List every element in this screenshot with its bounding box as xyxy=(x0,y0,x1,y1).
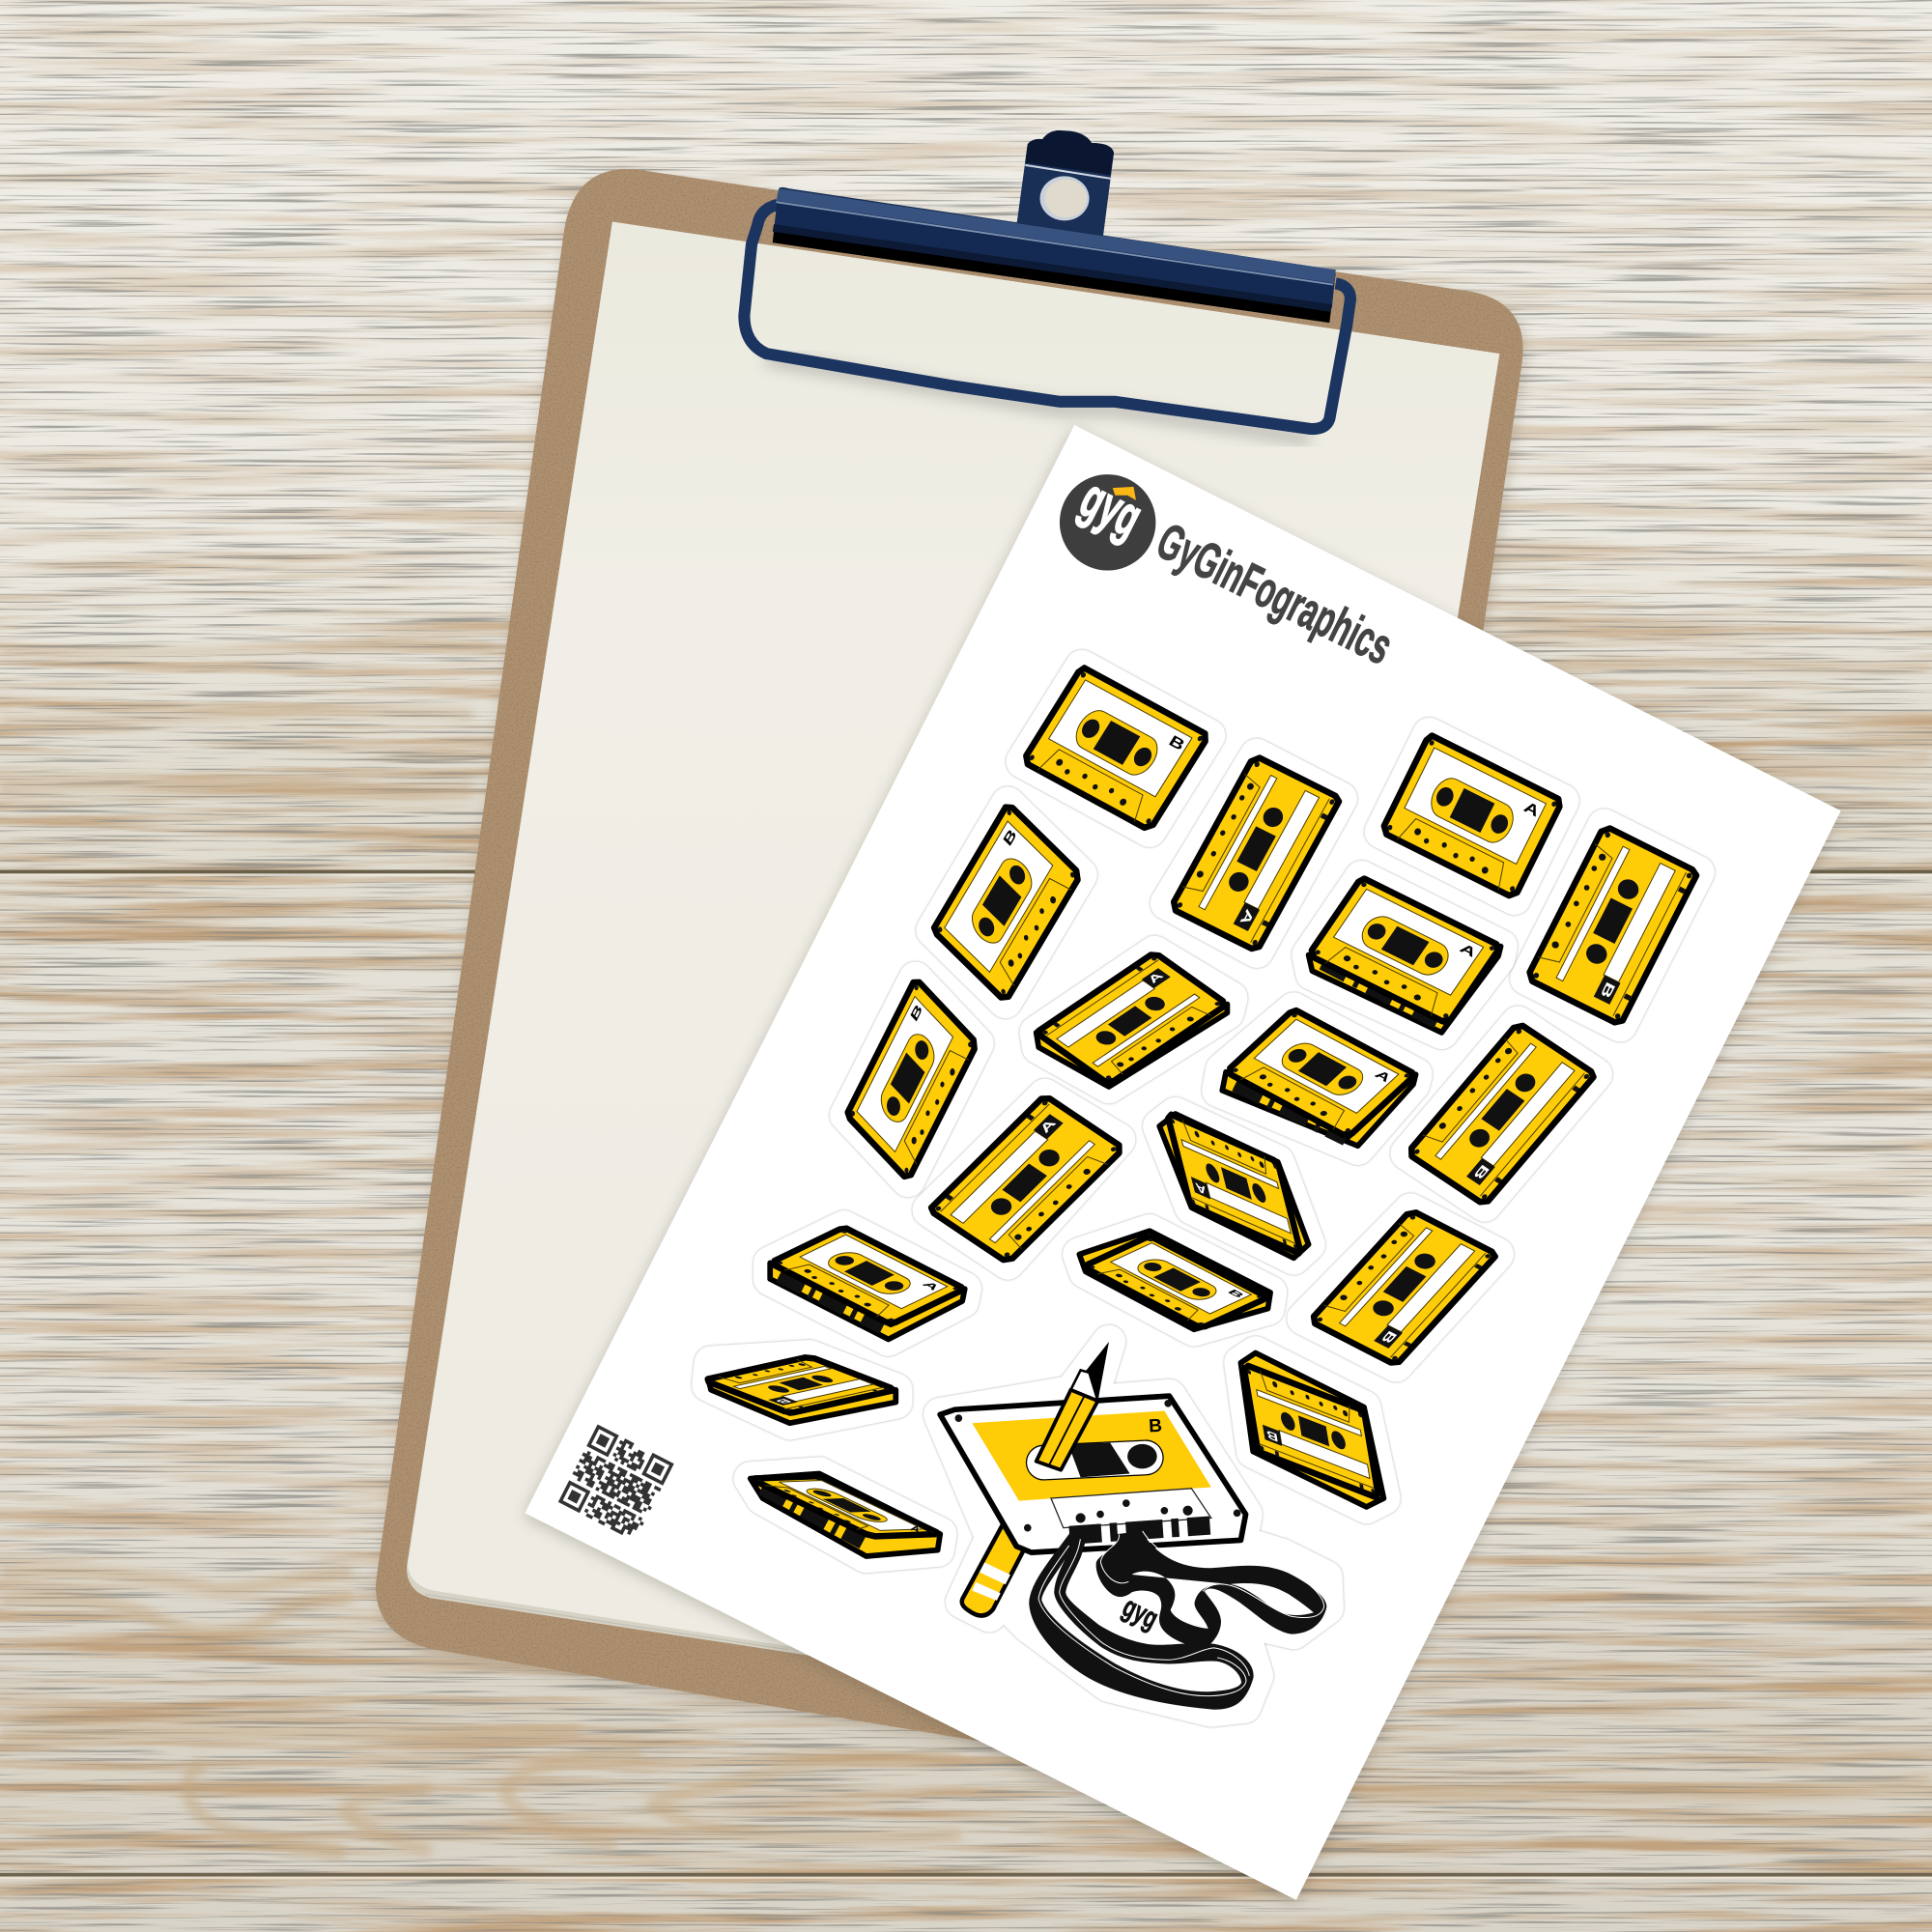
cassette sticker: back A thick xyxy=(1037,952,1231,1087)
cassette sticker: flat back B: B xyxy=(772,1398,795,1405)
brand logo badge xyxy=(1060,468,1155,571)
cassette sticker: back B lower right: B xyxy=(1378,1328,1400,1346)
cassette sticker: back B right xyxy=(1407,1023,1596,1205)
lower pencil stub xyxy=(962,1521,1029,1616)
cassette sticker: face A with windows: A xyxy=(1372,1068,1395,1085)
cassette sticker: flat face B xyxy=(1079,1231,1270,1329)
cassette sticker: face B steep xyxy=(846,979,977,1180)
cassette sticker: back B lower right xyxy=(1303,1210,1497,1365)
cassette sticker: face A lower left: A xyxy=(919,1280,943,1293)
brand logo badge: gyg xyxy=(1070,468,1151,550)
cassette sticker: flat face A with windows xyxy=(751,1474,940,1556)
cassette sticker: back A thick: A xyxy=(1145,970,1167,985)
clip wire loop xyxy=(744,205,1350,429)
cassette sticker: face B top xyxy=(1023,667,1208,831)
pencil xyxy=(1037,1342,1109,1470)
cassette sticker: back A skewed: A xyxy=(1193,1179,1208,1197)
cassette sticker: back B right: B xyxy=(1470,1162,1492,1182)
cassette sticker: face A with thick edge: A xyxy=(1457,941,1480,959)
cassette sticker: flat back B xyxy=(703,1356,895,1423)
tape logo: gyg xyxy=(1118,1589,1164,1635)
cassette sticker: back B far right xyxy=(1526,826,1698,1025)
cassette sticker: back A skewed xyxy=(1159,1113,1309,1258)
cassette sticker: back B bottom right: B xyxy=(1265,1427,1279,1444)
cassette sticker: flat face A with windows: A xyxy=(909,1523,923,1536)
hero sticker: cassette with pencil and tape xyxy=(940,1342,1327,1710)
cassette sticker: face A with windows xyxy=(1218,1009,1416,1149)
cassette sticker: back B bottom right xyxy=(1240,1353,1383,1507)
cassette sticker: face B tilted: B xyxy=(1000,825,1019,849)
big white cassette body: B xyxy=(1149,1416,1163,1436)
paper stack on clipboard xyxy=(407,222,1499,1730)
cassette sticker: back A centre: A xyxy=(1037,1117,1059,1135)
film tape ribbons xyxy=(1031,1529,1326,1708)
big white cassette body xyxy=(940,1396,1246,1552)
cassette sticker: face A lower left xyxy=(770,1227,965,1339)
cassette sticker: face A upper right xyxy=(1381,734,1562,898)
cassette sticker: back A: A xyxy=(1236,907,1257,927)
cassette sticker: face B top: B xyxy=(1166,732,1188,753)
cassette sticker: flat face B: B xyxy=(1225,1289,1247,1299)
sticker sheet xyxy=(524,425,1841,1904)
brand name: GyGinFographics xyxy=(1149,513,1401,675)
QR code xyxy=(558,1424,674,1542)
cassette sticker: back A xyxy=(1167,755,1341,952)
cassette sticker: face A with thick edge xyxy=(1309,877,1501,1033)
metal clip xyxy=(744,130,1350,439)
clip tube xyxy=(773,187,1336,323)
cassette sticker: face A upper right: A xyxy=(1521,798,1543,820)
clipboard board xyxy=(373,168,1532,1754)
clip tab with hole xyxy=(1016,130,1114,239)
cassette sticker: face B tilted xyxy=(933,804,1081,1002)
cassette sticker: back A centre xyxy=(929,1095,1123,1263)
cassette sticker: back B far right: B xyxy=(1597,980,1618,1001)
cassette sticker: face B steep: B xyxy=(908,1001,924,1025)
